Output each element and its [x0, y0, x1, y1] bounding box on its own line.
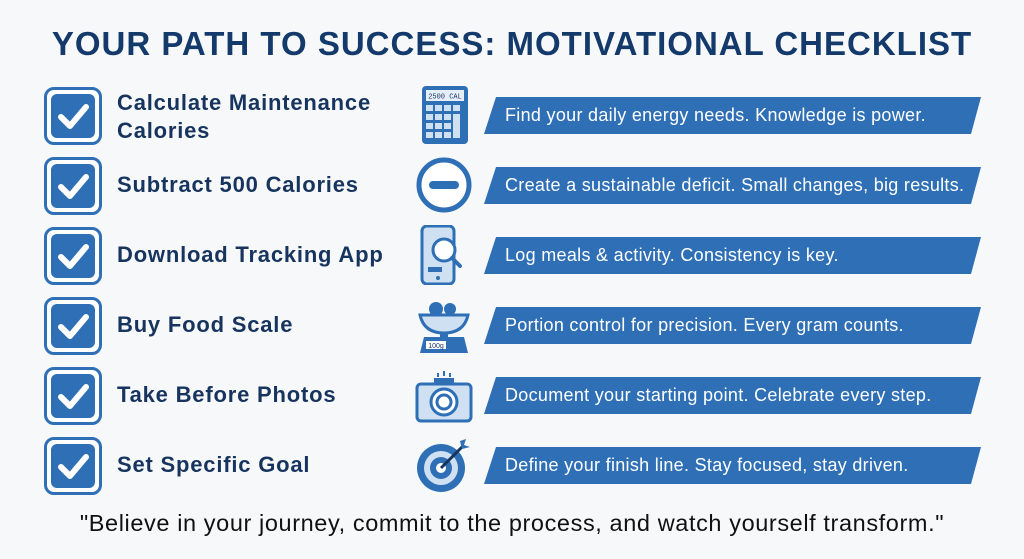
icon: food scale: 100g — [428, 343, 444, 350]
banner — [484, 237, 981, 274]
label: Buy Food Scale — [117, 312, 293, 337]
label — [117, 90, 371, 143]
banner — [484, 97, 981, 134]
icon: food scale — [418, 302, 470, 353]
banner — [484, 307, 981, 344]
banner — [484, 447, 981, 484]
banner: Find your daily energy needs. Knowledge is power. — [505, 105, 926, 125]
checkbox — [44, 87, 102, 145]
label: Calculate Maintenance — [117, 90, 371, 115]
icon: calculator — [422, 86, 468, 144]
title: YOUR PATH TO SUCCESS: MOTIVATIONAL CHECKLIST — [52, 25, 972, 62]
row 1 — [44, 86, 981, 145]
banner: Portion control for precision. Every gram counts. — [505, 315, 904, 335]
checkbox — [44, 367, 102, 425]
label: Set Specific Goal — [117, 452, 310, 477]
row 5 — [44, 367, 981, 425]
banner: Log meals & activity. Consistency is key. — [505, 245, 839, 265]
banner: Document your starting point. Celebrate every step. — [505, 385, 932, 405]
icon: phone app — [420, 225, 462, 285]
icon: calculator: 2500 CAL — [428, 94, 462, 102]
row 3 — [44, 225, 981, 285]
checkbox — [44, 297, 102, 355]
label: Take Before Photos — [117, 382, 336, 407]
checkbox — [44, 437, 102, 495]
checkbox — [44, 157, 102, 215]
banner — [484, 167, 981, 204]
icon: target — [417, 439, 470, 492]
banner: Define your finish line. Stay focused, stay driven. — [505, 455, 908, 475]
row 4 — [44, 297, 981, 355]
row 6 — [44, 437, 981, 495]
label: Subtract 500 Calories — [117, 172, 359, 197]
icon: camera — [416, 371, 472, 422]
banner — [484, 377, 981, 414]
checkbox — [44, 227, 102, 285]
row 2 — [44, 157, 981, 215]
label: Download Tracking App — [117, 242, 384, 267]
label: Calories — [117, 118, 210, 143]
quote: "Believe in your journey, commit to the process, and watch yourself transform." — [80, 510, 944, 536]
icon: minus circle — [416, 158, 472, 212]
banner: Create a sustainable deficit. Small changes, big results. — [505, 175, 964, 195]
